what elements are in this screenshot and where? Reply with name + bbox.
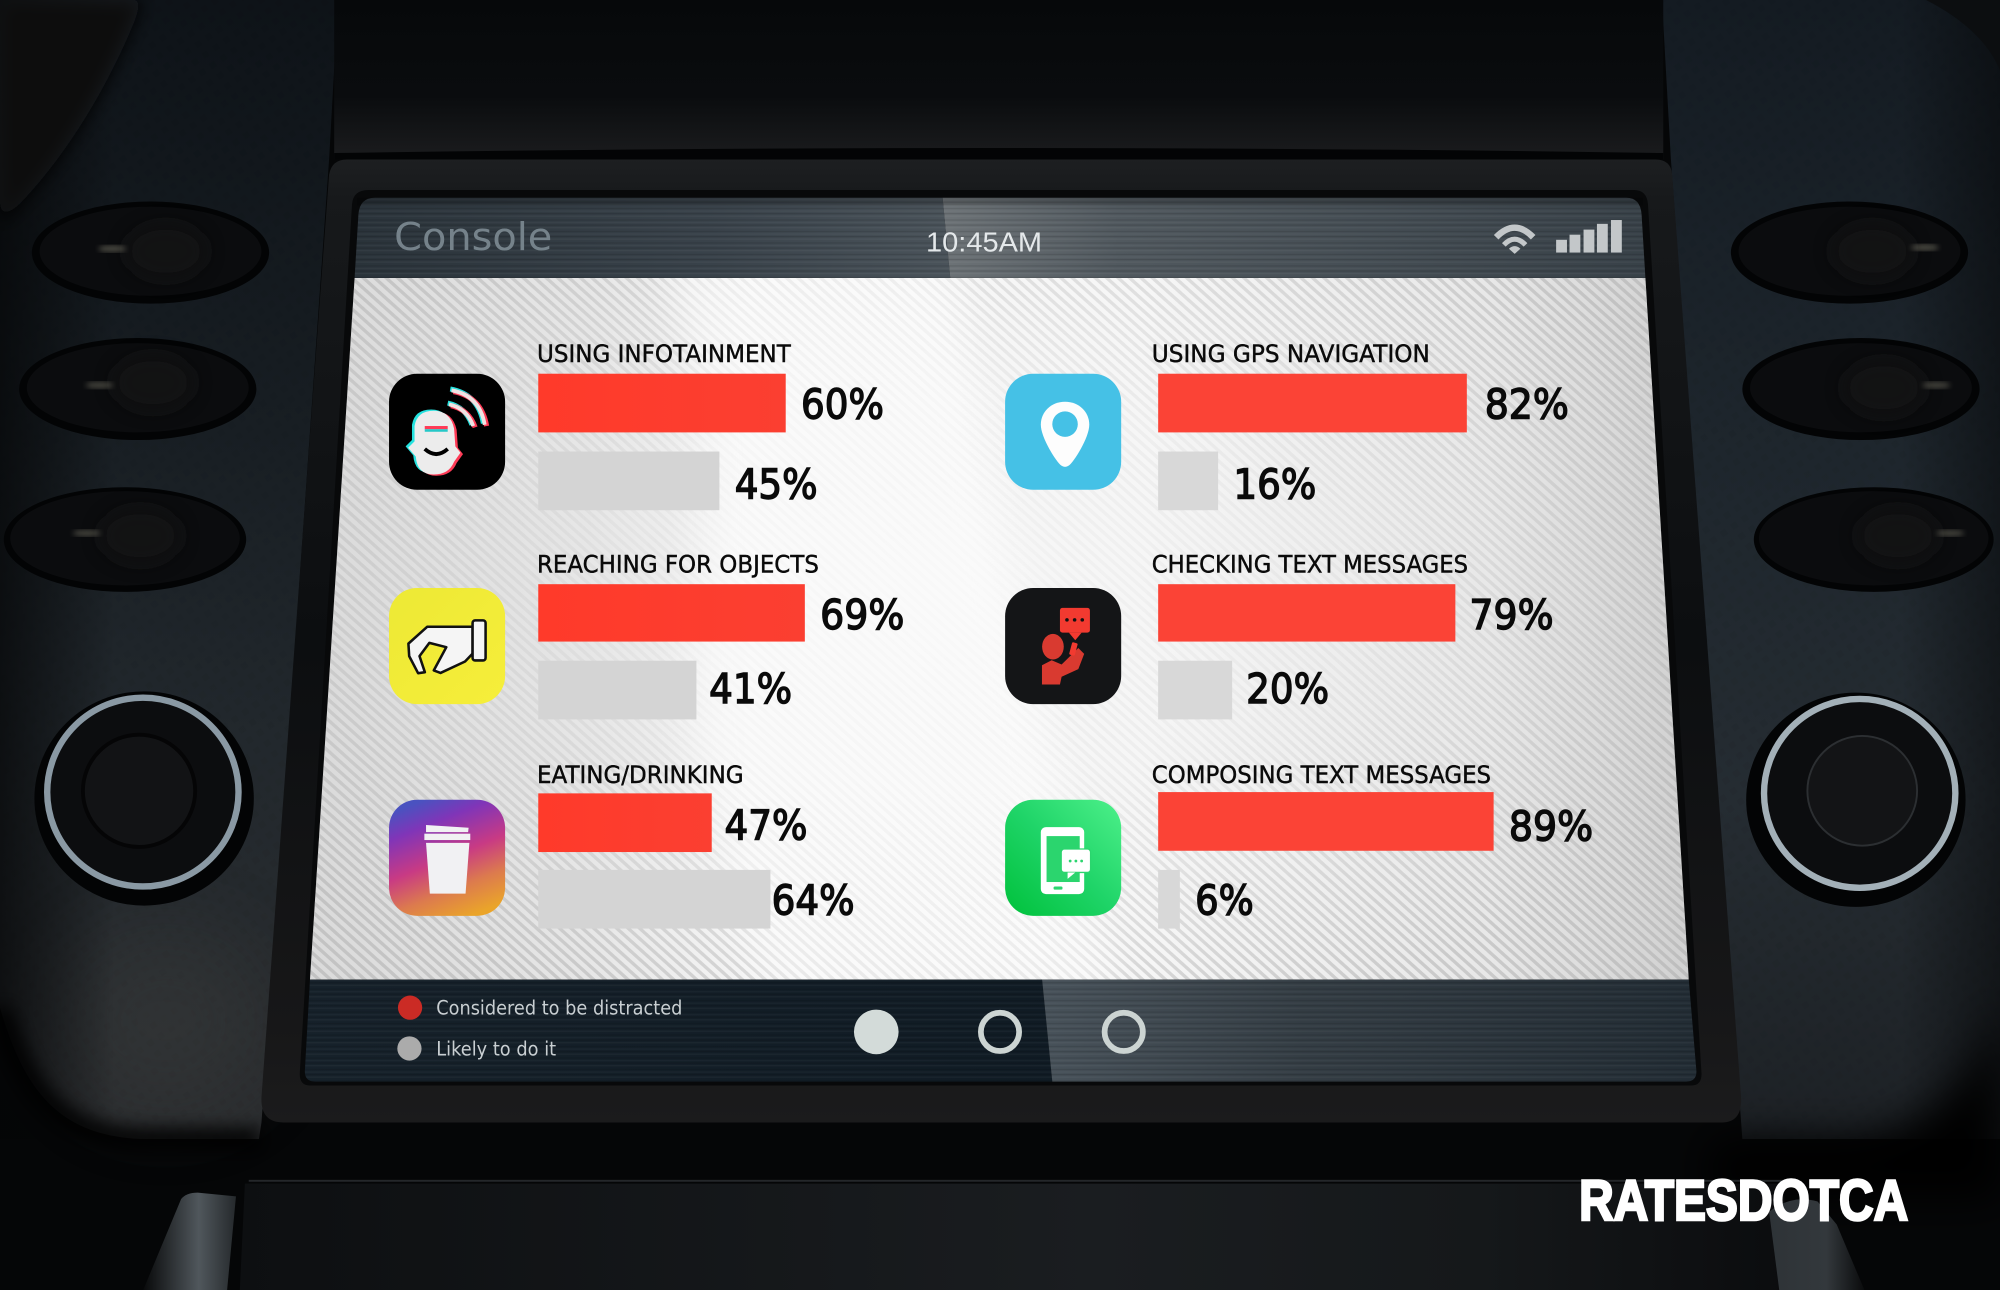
icon: wifi	[1496, 228, 1533, 254]
panel: top status bar	[355, 198, 1645, 278]
value 89%: 89%	[1509, 803, 1593, 851]
column right	[1769, 1199, 1865, 1290]
console title: Console	[394, 215, 552, 260]
value 6%: 6%	[1195, 877, 1254, 925]
panel: white chart screen	[306, 255, 1696, 1008]
panel: screen bezel	[261, 159, 1741, 1122]
value 82%: 82%	[1485, 380, 1569, 428]
stat: reaching for objects	[389, 551, 904, 719]
panel: bottom navigation bar	[305, 980, 1696, 1082]
bar distracted	[1158, 374, 1467, 432]
legend: likely: Likely to do it	[436, 1037, 557, 1060]
icon: person reading message	[1005, 588, 1121, 704]
heading: USING GPS NAVIGATION	[1152, 340, 1430, 368]
bar distracted	[538, 793, 712, 852]
bar likely	[1158, 452, 1218, 510]
oval vent 2	[1742, 338, 1980, 440]
heading: EATING/DRINKING	[537, 761, 744, 789]
oval vent 3	[1754, 487, 1994, 592]
page dot 3	[1105, 1013, 1143, 1051]
column left	[143, 1193, 236, 1290]
oval vent 2	[19, 338, 256, 440]
bar likely	[538, 870, 770, 929]
panel: left dashboard	[0, 0, 338, 1139]
heading: COMPOSING TEXT MESSAGES	[1152, 761, 1491, 789]
bar likely	[1158, 870, 1180, 929]
value 64%: 64%	[772, 877, 855, 925]
value 47%: 47%	[724, 801, 807, 849]
clock: 10:45AM	[926, 226, 1042, 257]
page dot active	[854, 1010, 899, 1054]
oval vent 3	[4, 487, 246, 592]
icon: face with signal	[389, 374, 505, 490]
bar likely	[538, 661, 696, 719]
value 69%: 69%	[820, 591, 904, 639]
icon: hand	[389, 588, 505, 704]
icon: phone with message	[1005, 800, 1121, 916]
value 20%: 20%	[1246, 665, 1329, 713]
panel: top centre shroud	[334, 0, 1663, 159]
heading: CHECKING TEXT MESSAGES	[1152, 551, 1468, 579]
value 45%: 45%	[735, 461, 818, 509]
bar likely	[1158, 661, 1232, 719]
value 16%: 16%	[1233, 461, 1316, 509]
bar distracted	[538, 584, 805, 642]
panel: right dashboard	[1662, 0, 2000, 1199]
heading: REACHING FOR OBJECTS	[537, 551, 819, 579]
bar distracted	[1158, 584, 1455, 642]
stat: checking text messages	[1005, 551, 1554, 719]
oval vent 1	[1731, 202, 1968, 304]
page dot 2	[981, 1013, 1019, 1051]
stat: using infotainment	[389, 340, 884, 510]
control knob right	[1746, 693, 1966, 907]
logo: RATESDOTCA: RATESDOTCA	[1579, 1169, 1908, 1233]
panel: bottom console	[143, 1180, 1865, 1290]
legend: distracted: Considered to be distracted	[436, 997, 682, 1020]
value 41%: 41%	[709, 665, 792, 713]
heading: USING INFOTAINMENT	[537, 340, 791, 368]
bar distracted	[1158, 792, 1494, 851]
value 79%: 79%	[1469, 591, 1554, 639]
stat: composing text messages	[1005, 761, 1593, 929]
value 60%: 60%	[801, 380, 884, 428]
control knob left	[34, 691, 254, 906]
stat: using gps navigation	[1005, 340, 1569, 510]
icon: cup	[389, 800, 505, 916]
icon: signal bars	[1556, 220, 1622, 253]
stat: eating/drinking	[389, 761, 855, 929]
icon: map pin	[1005, 374, 1121, 490]
bar distracted	[538, 374, 786, 432]
oval vent 1	[32, 202, 269, 304]
legend: likely	[397, 1036, 557, 1061]
bar likely	[538, 452, 719, 510]
